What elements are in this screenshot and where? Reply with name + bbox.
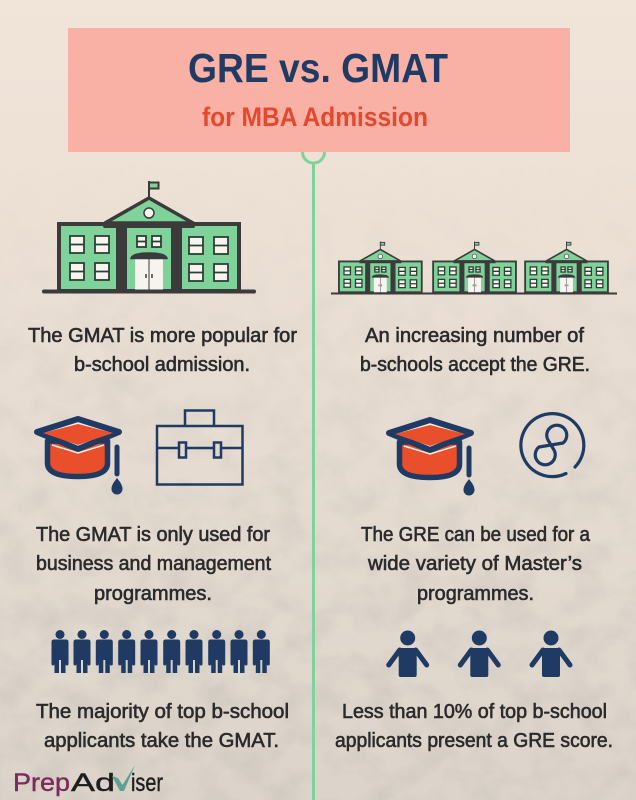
logo: PrepAdviser: Prep [13,769,70,797]
text: GMAT programmes: business and management [36,553,271,575]
text: GRE acceptance: An increasing number of [365,325,584,347]
icon: ten people [52,630,270,673]
text: GMAT programmes [36,524,271,605]
title: GRE vs. GMAT [188,45,448,91]
text: GMAT applicants: The majority of top b-school [36,701,289,723]
text: GMAT popularity: b-school admission. [74,354,250,376]
text: GMAT applicants [36,701,289,752]
text: GMAT programmes: programmes. [94,583,212,605]
icon: three people [389,630,570,677]
text: GRE applicants: applicants present a GRE score. [335,730,613,752]
text: GRE applicants: Less than 10% of top b-school [342,701,607,723]
text: GRE programmes [361,524,591,605]
icon: three small school buildings [331,242,617,294]
icon: graduation cap left [37,419,122,495]
title banner [68,28,570,152]
text: GRE programmes: The GRE can be used for a [361,524,591,546]
logo: PrepAdviser [13,765,163,797]
text: GMAT popularity [28,325,297,376]
text: GRE programmes: wide variety of Master’s [367,553,582,575]
icon: graduation cap right [389,420,474,496]
text: GRE acceptance: b-schools accept the GRE. [360,354,590,376]
icon: briefcase [157,410,242,484]
text: GRE applicants [335,701,613,752]
subtitle: for MBA Admission [202,102,428,132]
center divider line with ring [302,141,324,800]
text: GMAT programmes: The GMAT is only used for [36,524,270,546]
text: GRE acceptance [360,325,590,376]
logo: PrepAdviser: Ad [71,769,115,797]
icon: infinity in circle [521,414,584,477]
text: GRE programmes: programmes. [417,583,534,605]
text: GMAT applicants: applicants take the GMAT. [44,730,279,752]
logo: PrepAdviser: iser [131,769,163,797]
text: GMAT popularity: The GMAT is more popular for [28,325,297,347]
icon: large school building [44,181,254,292]
